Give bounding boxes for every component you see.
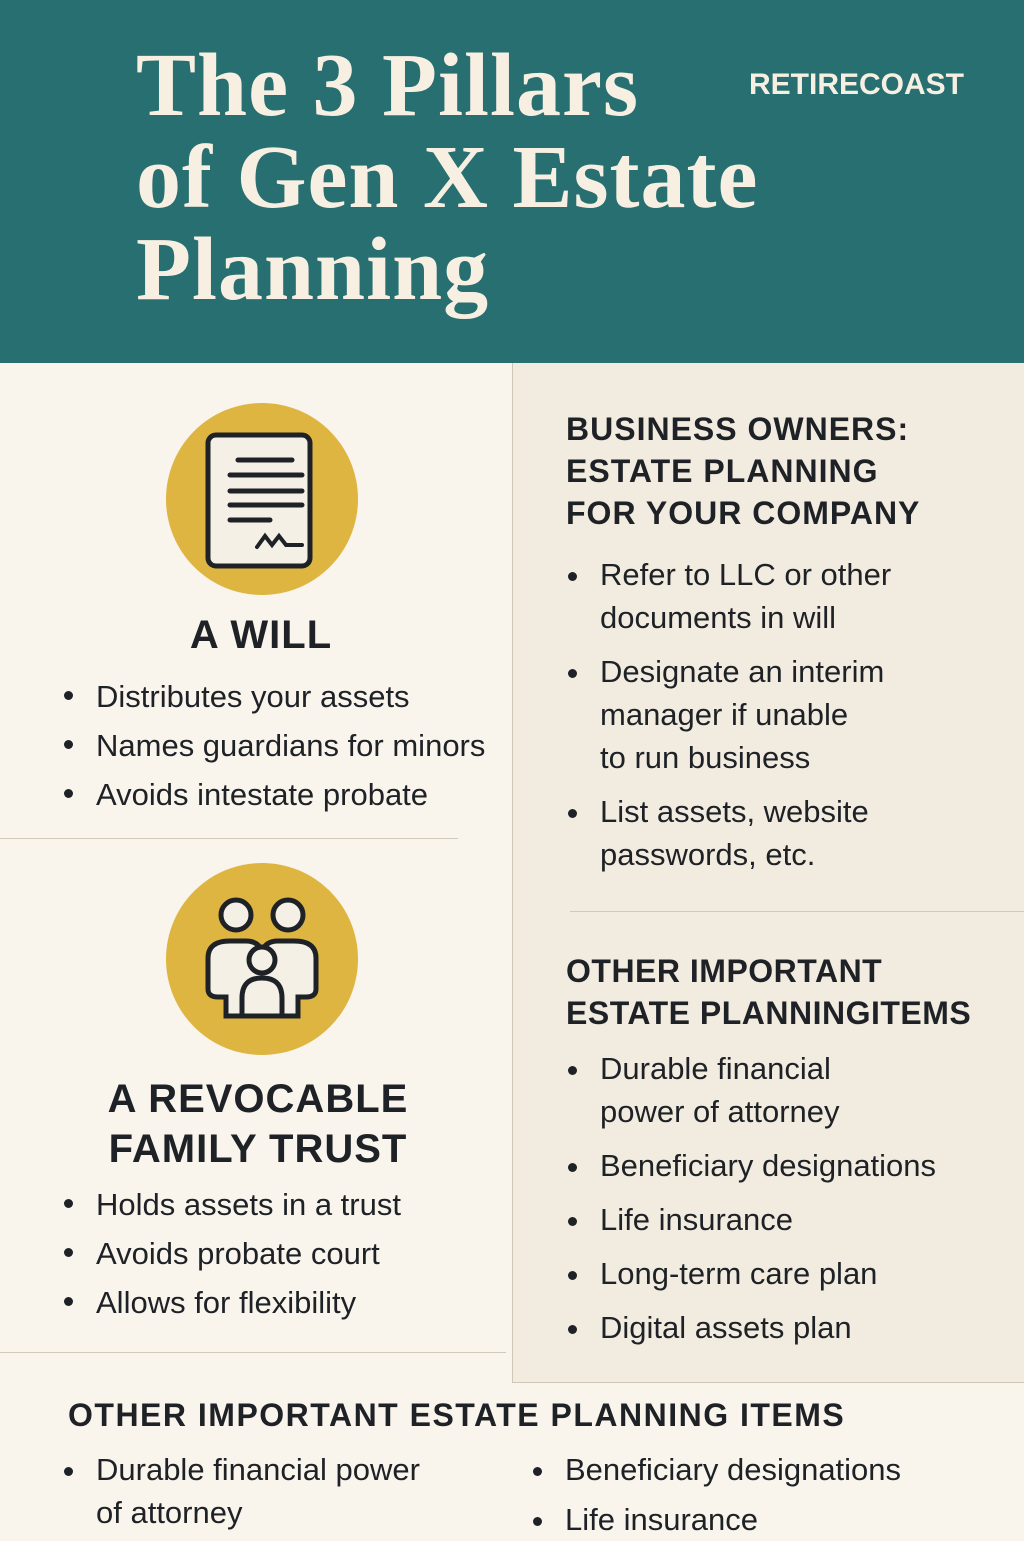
list: bottom right (533, 1452, 901, 1537)
heading: business owners: ESTATE PLANNING (566, 453, 878, 489)
right panel (512, 363, 1024, 1383)
heading: business owners: FOR YOUR COMPANY (566, 495, 920, 531)
list: bottom left: Durable financial power (96, 1452, 420, 1487)
list: business (568, 557, 891, 872)
heading: revocable trust: FAMILY TRUST (109, 1127, 407, 1171)
list: other right: Durable financial (600, 1051, 831, 1086)
list: other right (568, 1051, 936, 1345)
list: trust: Avoids probate court (96, 1236, 380, 1271)
icon: family (166, 863, 358, 1055)
brand: RETIRECOAST (749, 68, 964, 101)
title: Planning (136, 220, 489, 319)
list: other right: Life insurance (600, 1202, 793, 1237)
list: trust: Holds assets in a trust (96, 1187, 401, 1222)
list: business: to run business (600, 740, 810, 775)
list: other right: Long-term care plan (600, 1256, 877, 1291)
title (136, 36, 758, 319)
list: other right: power of attorney (600, 1094, 840, 1129)
list: other right: Digital assets plan (600, 1310, 852, 1345)
list: bottom left: of attorney (96, 1495, 242, 1530)
heading: revocable trust: A REVOCABLE (108, 1077, 408, 1121)
list: trust (64, 1187, 401, 1320)
list: will: Avoids intestate probate (96, 777, 428, 812)
list: bottom left (64, 1452, 420, 1530)
icon: will document (166, 403, 358, 595)
list: will: Distributes your assets (96, 679, 410, 714)
list: business: Designate an interim manager if unable (600, 654, 884, 732)
list: business: Refer to LLC or other documents in will (600, 557, 891, 635)
heading: other items right (566, 953, 971, 1031)
heading: business owners: BUSINESS OWNERS: (566, 411, 909, 447)
header (0, 0, 1024, 363)
title: The 3 Pillars (136, 36, 639, 135)
list: will (64, 679, 485, 812)
heading: other items right: OTHER IMPORTANT (566, 953, 882, 989)
list: trust: Allows for flexibility (96, 1285, 356, 1320)
heading: revocable trust (108, 1077, 408, 1171)
heading: other items right: ESTATE PLANNINGITEMS (566, 995, 971, 1031)
list: will: Names guardians for minors (96, 728, 485, 763)
heading: bottom other items: OTHER IMPORTANT ESTATE PLANNING ITEMS (68, 1397, 845, 1433)
list: other right: Beneficiary designations (600, 1148, 936, 1183)
list: business: List assets, website passwords, etc. (600, 794, 869, 872)
list: bottom right: Life insurance (565, 1502, 758, 1537)
list: bottom right: Beneficiary designations (565, 1452, 901, 1487)
heading: business owners (566, 411, 920, 531)
title: of Gen X Estate (136, 128, 758, 227)
heading: a will: A WILL (190, 613, 332, 657)
